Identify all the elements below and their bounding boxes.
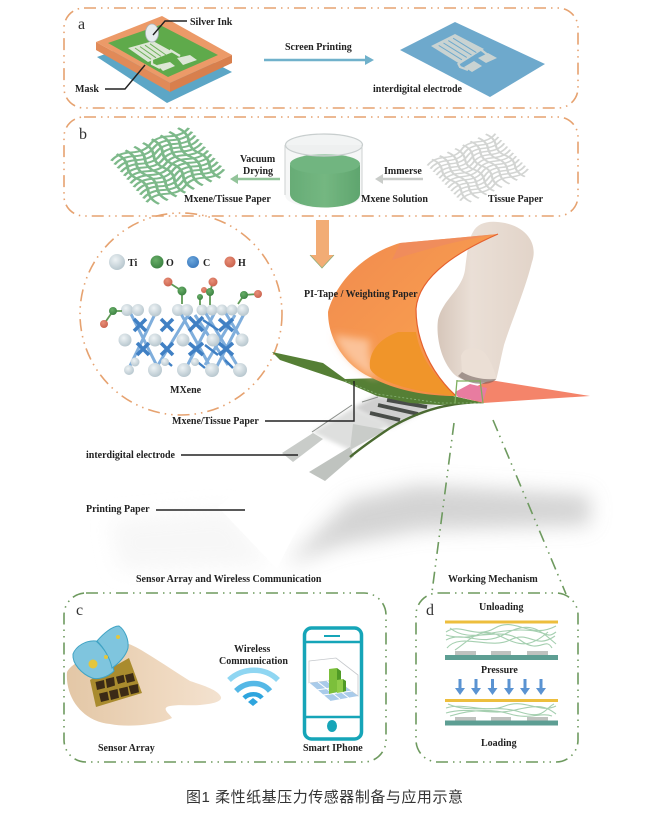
legend: atoms: H: [238, 258, 246, 269]
icon: beaker of mxene solution: [285, 134, 428, 208]
icon: screen printing frame: [96, 16, 232, 103]
panel a: screen printing: [64, 8, 578, 108]
label: sensor array: Sensor Array: [98, 743, 155, 754]
icon: mxene tissue paper: [109, 125, 271, 207]
icon: interdigital electrode sheet: [373, 22, 545, 97]
icon: beaker of mxene solution: Mxene Solution: [361, 194, 428, 205]
label: silver ink: Silver Ink: [190, 17, 233, 28]
icon: wifi: Communication: [219, 656, 288, 667]
label: interdigital electrode: interdigital electrode: [86, 450, 176, 461]
arrow: immerse: Immerse: [384, 166, 422, 177]
label: PI tape: PI-Tape / Weighting Paper: [304, 289, 418, 300]
panel c: sensor array and wireless: [64, 593, 386, 762]
label a: a: [78, 16, 85, 33]
arrow: process down: [310, 220, 334, 268]
legend: atoms: [109, 254, 246, 270]
diagram: mxene lattice: [100, 278, 262, 396]
electrode pattern: [282, 396, 440, 481]
label: unloading: Unloading: [479, 602, 523, 613]
label: smart iphone: Smart IPhone: [303, 743, 363, 754]
label: mask: [75, 65, 145, 95]
arrow: screen printing: Screen Printing: [285, 42, 352, 53]
diagram: mxene lattice: MXene: [170, 385, 202, 396]
diagram: unloading state: [445, 620, 558, 660]
diagram: loading state: [445, 699, 558, 726]
icon: sensor patch: [90, 658, 142, 707]
label: mxene tissue paper: Mxene/Tissue Paper: [172, 416, 259, 427]
panel d: working mechanism: [416, 593, 578, 762]
label: mxene tissue paper: [172, 381, 354, 427]
illustration: orange PI tape: [328, 234, 498, 396]
icon: tissue paper: [425, 131, 544, 205]
label: pressure: Pressure: [481, 665, 518, 676]
illustration: finger: [438, 222, 534, 384]
panel b: tissue paper immersion: [64, 117, 578, 216]
label d: d: [426, 602, 434, 619]
legend: atoms: C: [203, 258, 210, 269]
legend: atoms: O: [166, 258, 174, 269]
caption: 图1 柔性纸基压力传感器制备与应用示意: [186, 788, 463, 806]
panel: mxene atomic structure: [80, 213, 282, 415]
illustration: green mxene tissue layer: [272, 352, 484, 405]
label: loading: Loading: [481, 738, 517, 749]
icon: interdigital electrode sheet: interdigital electrode: [373, 84, 463, 95]
legend: atoms: Ti: [128, 258, 137, 269]
arrow: immerse: [375, 166, 423, 184]
label c: c: [76, 602, 83, 619]
illustration: bottom tape strip: [455, 380, 590, 403]
icon: pressure arrows: [455, 679, 546, 695]
heading: sensor array: Sensor Array and Wireless Communication: [136, 574, 322, 585]
arrow: vacuum drying: Drying: [243, 166, 273, 177]
illustration: bent printing paper with electrode: [218, 396, 486, 569]
arrow: vacuum drying: Vacuum: [240, 154, 276, 165]
3d bar chart: [309, 658, 358, 701]
label b: b: [79, 126, 87, 143]
icon: tissue paper: Tissue Paper: [488, 194, 544, 205]
label: printing paper: Printing Paper: [86, 504, 150, 515]
heading: working mechanism: Working Mechanism: [448, 574, 538, 585]
icon: wifi: [219, 644, 288, 706]
callout lines: working mechanism: [432, 380, 566, 594]
icon: wifi: Wireless: [234, 644, 270, 655]
arrow: vacuum drying: [230, 154, 280, 184]
label: mask: Mask: [75, 84, 99, 95]
icon: hand: [67, 644, 221, 726]
icon: mxene tissue paper: Mxene/Tissue Paper: [184, 194, 271, 205]
panel: shadows beneath paper: [110, 485, 590, 570]
icon: butterfly: [73, 626, 128, 679]
label: silver ink: [153, 17, 233, 35]
arrow: screen printing: [264, 42, 374, 65]
icon: smartphone with chart: [304, 628, 362, 739]
